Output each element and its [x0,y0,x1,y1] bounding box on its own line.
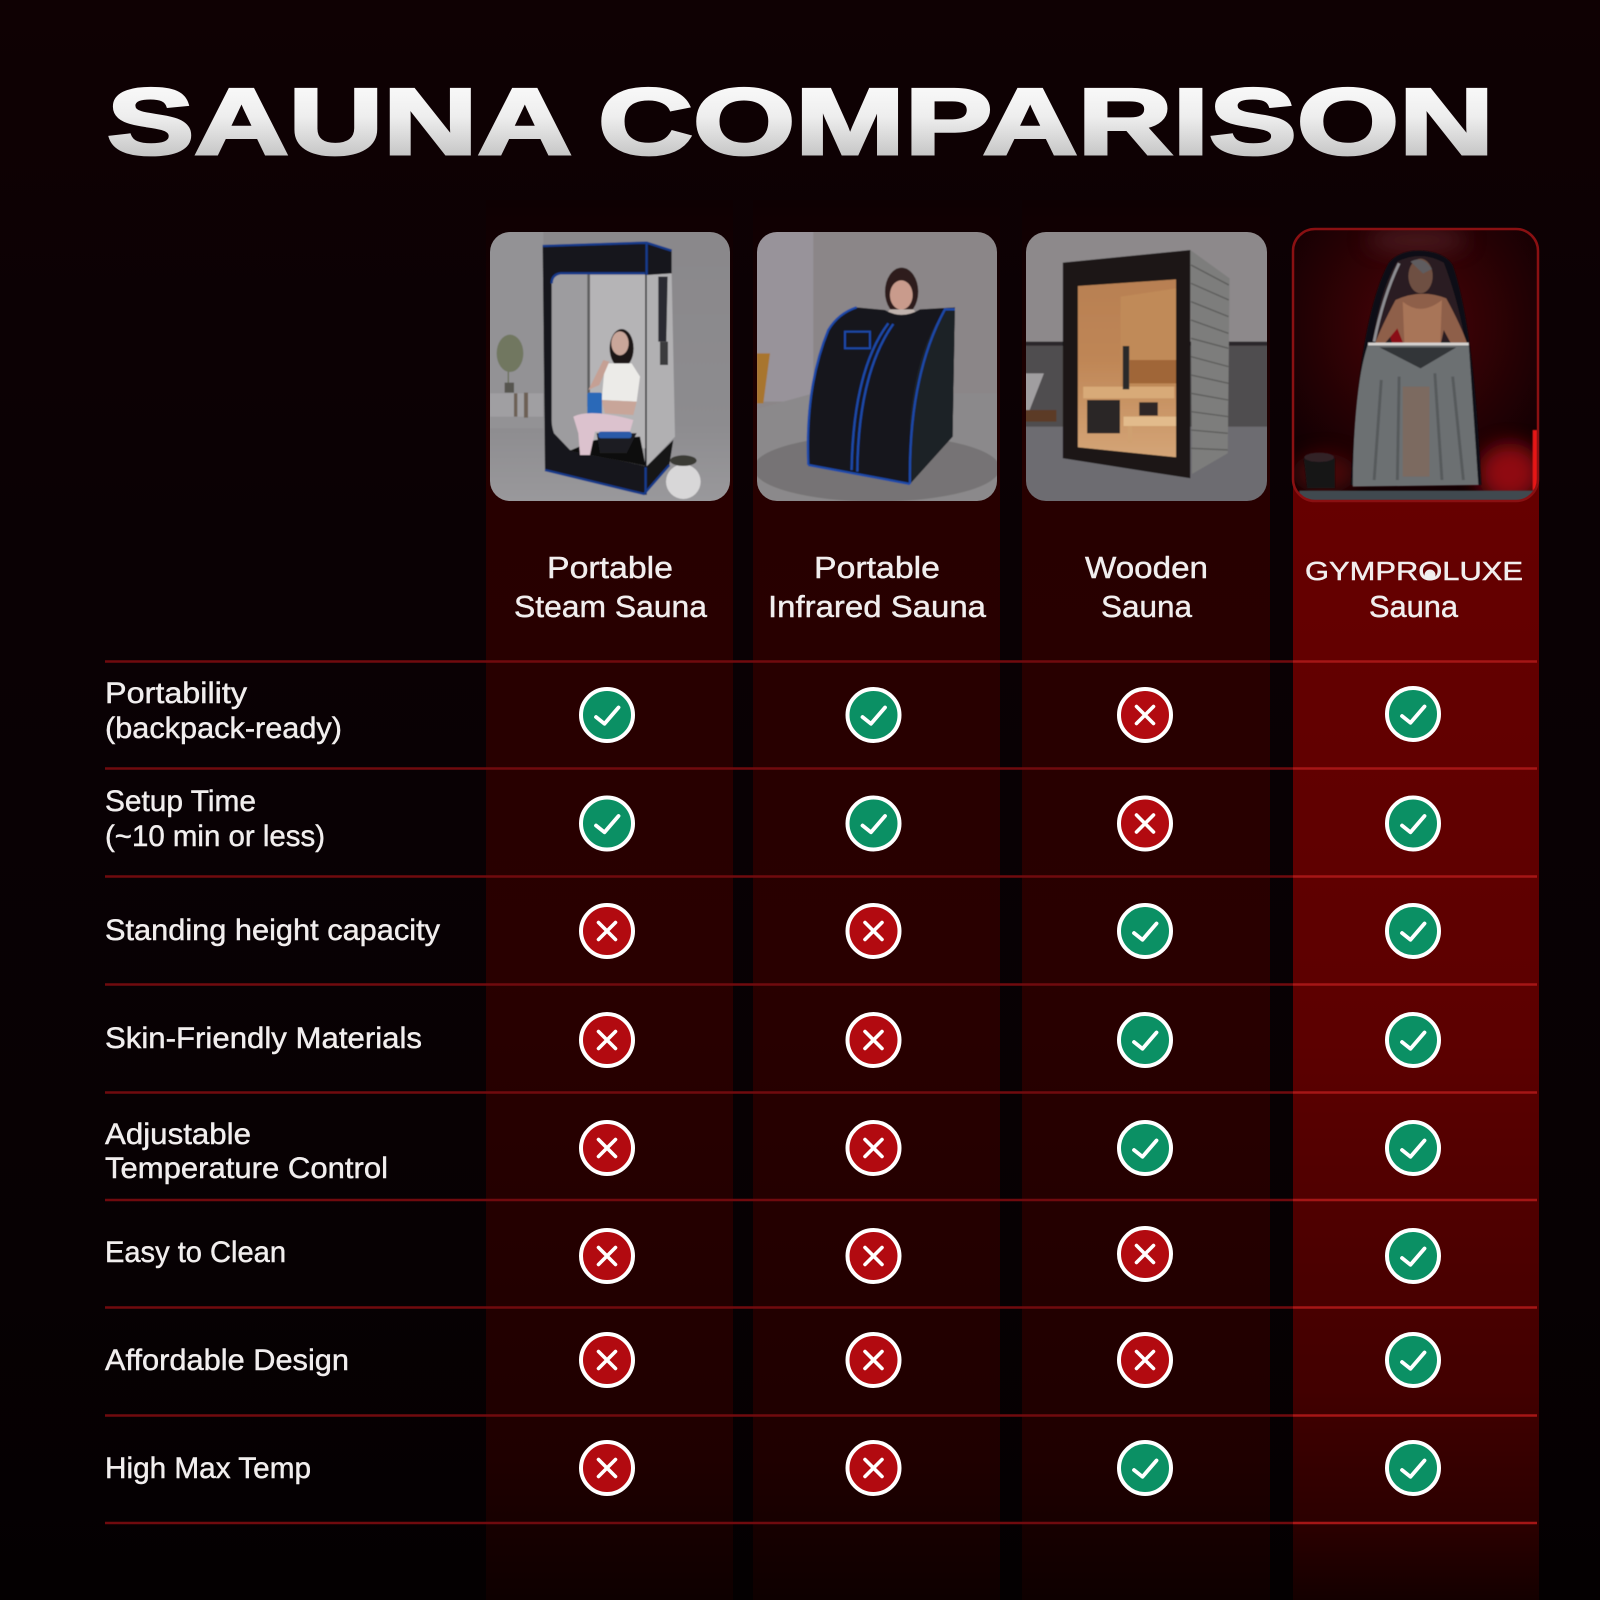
row label: Adjustable Temperature Control: Temperature Control [105,1152,388,1185]
title: SAUNA [107,69,572,174]
column band: Portable Steam Sauna [486,200,733,1600]
column heading: Portable Infrared Sauna: Portable [814,550,940,585]
row label: Portability: (backpack-ready) [105,712,342,745]
column band: Gymproluxe Sauna [1293,400,1539,1600]
row icons: Skin-Friendly Materials [581,1014,1439,1066]
row label: Easy to Clean: Easy to Clean [105,1236,286,1269]
row icons: Standing height capacity [581,905,1439,957]
row label: High Max Temp: High Max Temp [105,1452,311,1485]
row label: Portability [105,677,342,745]
column band: Portable Infrared Sauna [753,200,1000,1600]
photo frame: gymproluxe highlight [1293,229,1538,501]
row icons: Setup Time [581,798,1439,850]
photo: portable infrared sauna [753,228,1000,507]
column heading: Gymproluxe Sauna: Sauna [1369,589,1459,624]
column heading: Gymproluxe Sauna [1305,558,1523,624]
column heading: Wooden Sauna: Sauna [1101,589,1193,624]
column heading: Portable Infrared Sauna [768,550,987,624]
row icons: Affordable Design [581,1334,1439,1386]
column heading: Portable Steam Sauna: Portable [547,550,673,585]
column heading: Portable Steam Sauna: Steam Sauna [514,589,708,624]
row label: Adjustable Temperature Control: Adjustable [105,1118,251,1151]
row label: Setup Time: Setup Time [105,785,256,818]
row label: Adjustable Temperature Control [105,1118,388,1185]
row label: Setup Time [105,785,325,853]
row label: Setup Time: (~10 min or less) [105,820,325,853]
photo: gymproluxe sauna [1288,227,1542,507]
column heading: Portable Infrared Sauna: Infrared Sauna [768,589,987,624]
photo: wooden sauna [1024,230,1269,503]
row icons: Easy to Clean [581,1228,1439,1282]
title: COMPARISON [598,69,1494,174]
column heading: Portable Steam Sauna [514,550,708,624]
row label: Portability: Portability [105,677,247,710]
title [107,69,1494,174]
row icons: Adjustable Temperature Control [581,1122,1439,1174]
column heading: Wooden Sauna: Wooden [1085,550,1208,585]
row icons: Portability [581,688,1439,741]
column band: Wooden Sauna [1022,200,1270,1600]
row label: Skin-Friendly Materials: Skin-Friendly Materials [105,1022,422,1055]
column heading: Wooden Sauna [1085,550,1208,624]
photo: portable steam sauna [487,228,733,505]
column heading: Gymproluxe Sauna: GYMPROLUXE [1305,558,1523,586]
row label: Affordable Design: Affordable Design [105,1344,349,1377]
row label: Standing height capacity: Standing height capacity [105,914,440,947]
row icons: High Max Temp [581,1442,1439,1494]
